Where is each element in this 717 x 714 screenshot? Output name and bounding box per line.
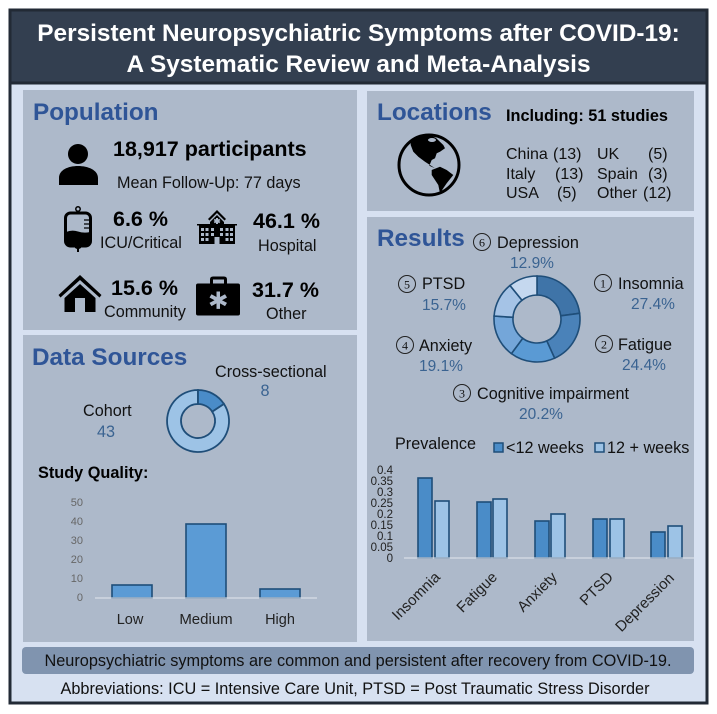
bar chart: prevalence by duration: Anxiety [514,568,561,616]
bar chart: study quality: 30 [71,535,83,547]
participants count: 18,917 participants [113,137,307,161]
label: PTSD [398,275,466,314]
label: insomnia: Insomnia [618,275,684,293]
community stat: Community [104,303,187,321]
label: cross-sectional: 8 [260,382,270,400]
ICU stat: 6.6 % [113,207,168,231]
title banner: A Systematic Review and Meta-Analysis [126,51,591,78]
abbreviations: Abbreviations: ICU = Intensive Care Unit, PTSD = Post Traumatic Stress Disorder [60,680,650,698]
label: cross-sectional [215,363,327,400]
label: insomnia [594,274,684,313]
community stat [104,276,187,321]
bar chart: prevalence by duration: 0.4 [377,465,394,477]
label: depression: 6 [479,236,485,250]
label: PTSD: 5 [404,278,410,292]
list: countries: China [506,146,548,163]
conclusion banner: Neuropsychiatric symptoms are common and persistent after recovery from COVID-19. [44,652,672,670]
label: cognitive impairment: 3 [459,386,465,400]
bar chart: study quality: 20 [71,554,83,566]
icon: house [58,275,102,312]
label: fatigue: Fatigue [618,336,672,354]
title banner [10,10,707,83]
list: countries: (3) [648,166,668,183]
bar chart: prevalence by duration: 0.15 [371,520,393,532]
label: depression: 12.9% [510,255,554,272]
legend [494,439,689,457]
bar chart: study quality: Low [117,612,144,628]
community stat: 15.6 % [111,276,178,300]
icon: hospital [197,210,237,244]
other stat: 31.7 % [252,278,319,302]
label: cohort: Cohort [83,402,132,420]
studies count: Including: 51 studies [506,107,668,125]
list: countries: Other [597,185,638,202]
bar chart: prevalence by duration: 0.05 [371,542,393,554]
panel: population [23,90,357,330]
icon: IV bag [66,207,90,252]
label: cross-sectional: Cross-sectional [215,363,327,381]
label: depression [474,234,579,272]
list: countries: (13) [553,146,581,163]
title banner: Persistent Neuropsychiatric Symptoms after COVID-19: [37,20,680,47]
other stat: Other [266,305,307,323]
panel: data sources [23,335,357,642]
bar chart: prevalence by duration: 0 [387,553,393,565]
panel: locations [367,91,694,211]
bar chart: prevalence by duration: Depression [612,570,678,635]
bar chart: study quality: Medium [179,611,233,628]
list: countries: (5) [648,146,668,163]
ICU stat [100,207,182,252]
heading: data sources: Data Sources [32,344,187,371]
label: cohort: 43 [97,423,115,441]
conclusion banner [22,647,694,674]
bar chart: study quality [71,497,317,628]
label: depression: Depression [497,234,579,252]
list: countries [506,146,671,202]
label: anxiety: 4 [402,338,408,352]
donut: study types [167,390,229,452]
label: fatigue [596,336,672,374]
legend: <12 weeks [506,439,584,457]
list: countries: Italy [506,166,535,183]
bar chart: study quality: 50 [71,497,83,509]
other stat [252,278,319,323]
list: countries: (12) [643,185,671,202]
label: insomnia: 1 [600,276,606,290]
hospital stat: Hospital [258,237,316,255]
bar chart: prevalence by duration: Fatigue [453,569,501,616]
donut: symptom prevalence [494,276,580,362]
bar chart: study quality: High [265,612,295,628]
label: cognitive impairment [454,384,630,423]
bar chart: study quality: 0 [77,592,83,604]
bar chart: prevalence by duration: PTSD [577,569,617,609]
bar chart: prevalence by duration: 0.1 [377,531,393,543]
label: cognitive impairment: 20.2% [519,406,563,423]
label: anxiety: Anxiety [419,337,473,355]
heading: locations: Locations [377,99,492,126]
bar chart: prevalence by duration [371,465,694,635]
hospital stat: 46.1 % [253,209,320,233]
label: PTSD: PTSD [422,275,465,293]
label: anxiety: 19.1% [419,358,463,375]
list: countries: UK [597,146,620,163]
label: insomnia: 27.4% [631,296,675,313]
label: PTSD: 15.7% [422,297,466,314]
legend: 12 + weeks [607,439,689,457]
bar chart: study quality: 40 [71,516,83,528]
icon: person [59,144,98,185]
list: countries: (5) [557,185,577,202]
heading: results: Results [377,225,465,252]
bar chart: prevalence by duration: 0.35 [371,476,393,488]
bar chart: prevalence by duration: 0.2 [377,509,393,521]
label: cognitive impairment: Cognitive impairment [477,385,630,403]
heading: study quality: Study Quality: [38,464,148,482]
follow-up: Mean Follow-Up: 77 days [117,174,301,192]
bar chart: prevalence by duration: 0.25 [371,498,393,510]
icon: medical case [196,276,240,316]
chart heading: prevalence: Prevalence [395,435,476,453]
list: countries: (13) [555,166,583,183]
hospital stat [253,209,320,255]
label: fatigue: 24.4% [622,357,666,374]
bar chart: prevalence by duration: 0.3 [377,487,393,499]
panel: results [367,217,694,641]
list: countries: USA [506,185,539,202]
heading: population: Population [33,99,159,126]
label: anxiety [396,336,473,375]
label: cohort [83,402,132,441]
list: countries: Spain [597,166,638,183]
bar chart: prevalence by duration: Insomnia [389,568,444,624]
bar chart: study quality: 10 [71,573,83,585]
ICU stat: ICU/Critical [100,234,182,252]
label: fatigue: 2 [601,338,607,352]
icon: globe [399,134,459,195]
